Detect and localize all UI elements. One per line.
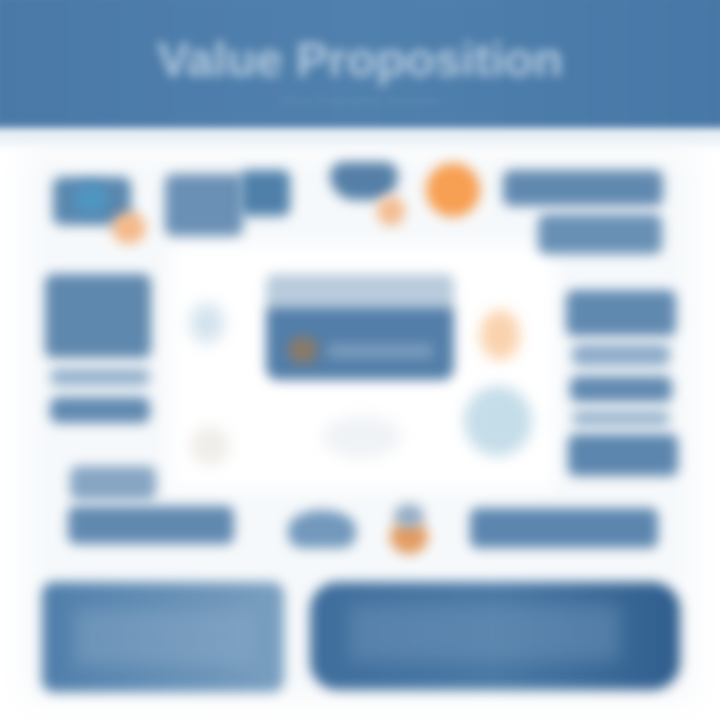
centre white area [170, 245, 555, 490]
panel: lower left band two [68, 506, 234, 544]
panel: left column band two [50, 397, 150, 423]
panel: lower left band one [70, 466, 156, 500]
icon: top left blue dot [74, 184, 108, 214]
bottom right text [350, 605, 620, 661]
panel: bottom right [310, 582, 680, 690]
icon: lower centre left sketch [190, 426, 230, 466]
panel: top centre card [330, 162, 398, 200]
panel: left column band one [50, 368, 150, 386]
centre card icon [288, 336, 318, 364]
centre card top [266, 274, 454, 310]
icon: right centre orange [480, 310, 520, 360]
icon: large orange circle [426, 163, 480, 217]
panel: right column three [570, 376, 672, 402]
header bottom glow [0, 132, 720, 144]
icon: right centre blue globe [464, 386, 532, 456]
icon: lower badge top [394, 504, 424, 528]
panel: right column one [566, 290, 676, 336]
bottom left text [75, 610, 255, 665]
panel: top left card [53, 177, 131, 225]
panel: bottom left [42, 582, 284, 692]
panel: right column four [572, 410, 670, 426]
panel: top card two [165, 174, 243, 236]
title: Value Proposition [157, 34, 563, 87]
panel: lower right band [470, 508, 658, 548]
icon: top left orange [112, 212, 146, 244]
panel: right column five [568, 434, 678, 476]
icon: small orange [377, 196, 405, 226]
panel: top right card upper [503, 170, 663, 206]
icon: left centre diagram [190, 303, 224, 343]
panel: top card two right [240, 170, 290, 216]
icon: lower centre sketch [322, 415, 402, 459]
centre card text [328, 344, 433, 358]
header band [0, 0, 720, 130]
panel: left column main [45, 274, 151, 358]
subtitle: Value Proposition Overview [281, 93, 439, 108]
icon: lower orange badge [390, 520, 428, 554]
panel: centre card [256, 267, 464, 390]
panel: top right card lower [538, 214, 662, 254]
page halo background [25, 150, 695, 700]
panel: right column two [572, 344, 670, 366]
centre card body [266, 308, 454, 380]
icon: lower cloud [288, 510, 356, 548]
